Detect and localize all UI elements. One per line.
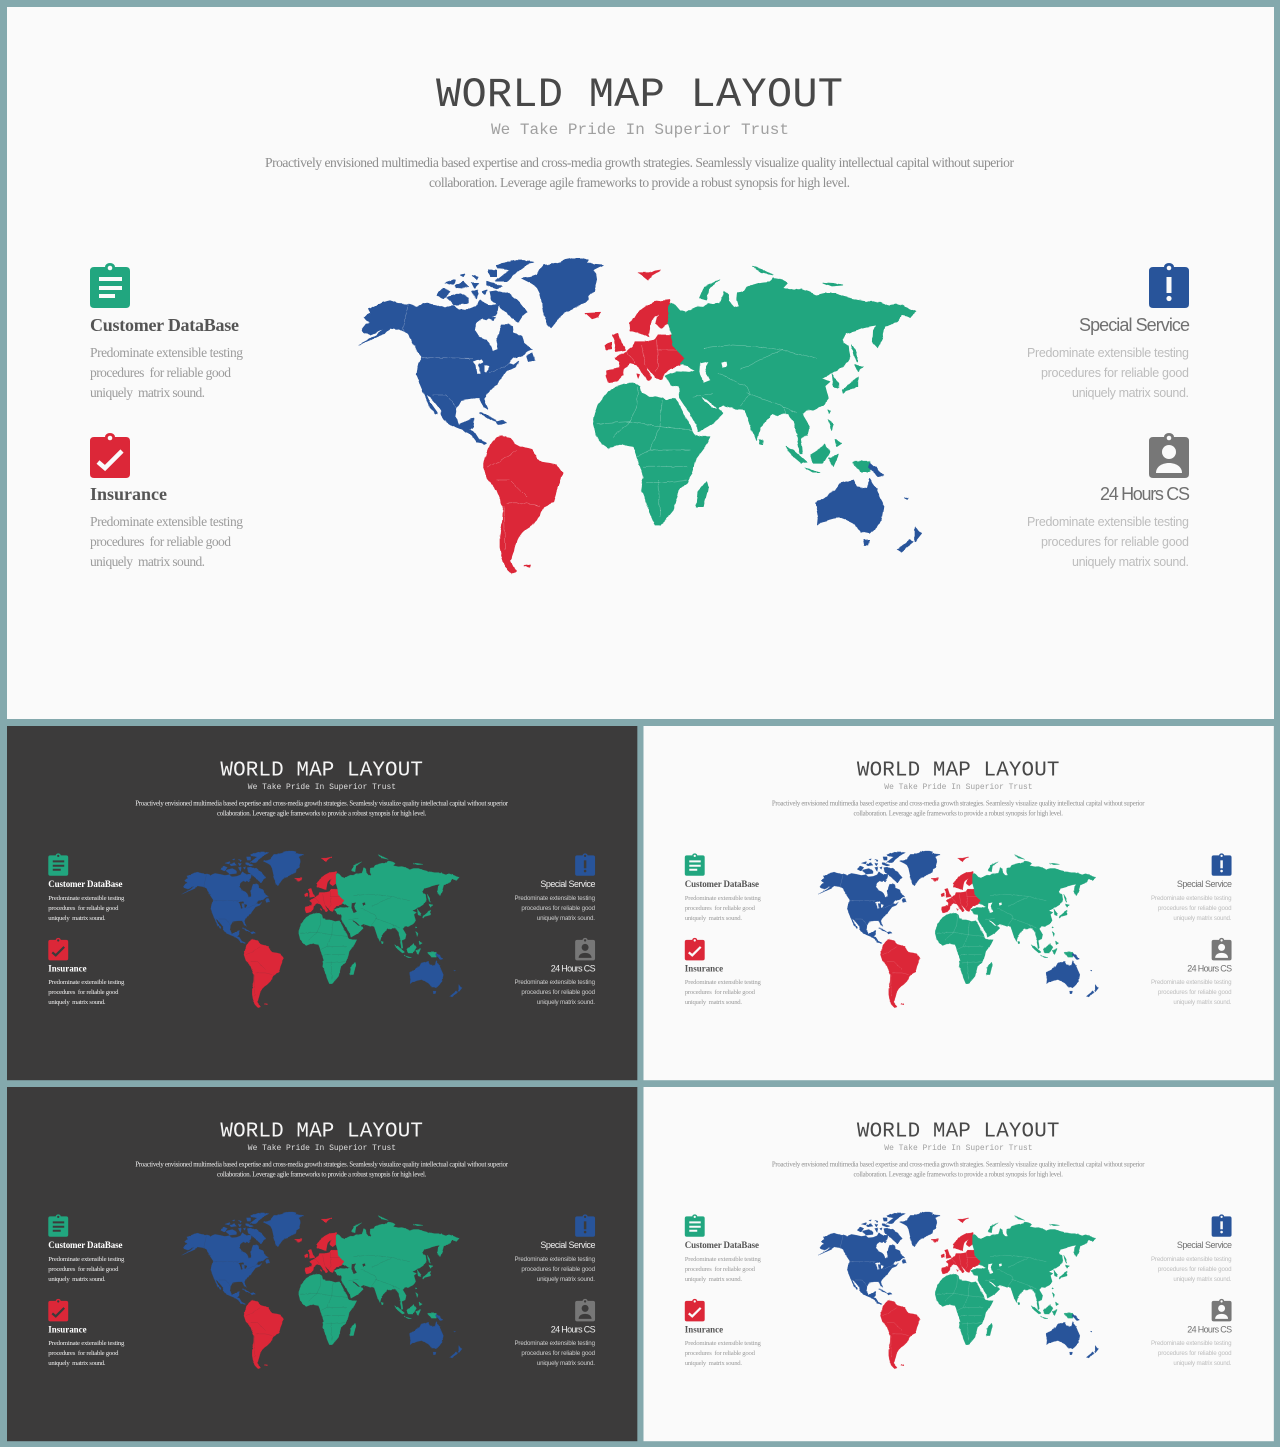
slide: dark thumbnail top: Proactively envisioned multimedia based expertise and cross-media growth strategies. Seamlessly visualize quality intellectual capital without superior: [135, 801, 509, 808]
slide: light thumbnail top: 24 Hours CS: [1187, 963, 1232, 973]
slide: dark thumbnail top: procedures for reliable good: [48, 989, 119, 996]
feature: Special Service: [1027, 263, 1190, 400]
slide: dark thumbnail top: Predominate extensible testing: [514, 979, 596, 986]
slide: light thumbnail top: collaboration. Leverage agile frameworks to provide a robust synopsis for high level.: [853, 811, 1063, 818]
slide: dark thumbnail top: Customer DataBase: [48, 879, 122, 889]
slide: dark thumbnail top: uniquely matrix sound.: [537, 915, 595, 922]
feature: Special Service: Special Service: [1079, 315, 1190, 335]
intro paragraph: [265, 155, 1014, 190]
slide: dark thumbnail top: uniquely matrix sound.: [48, 999, 106, 1006]
slide: main light slide: [7, 7, 1274, 719]
slide: light thumbnail top: uniquely matrix sound.: [685, 999, 742, 1006]
slide: light thumbnail top: procedures for reliable good: [1158, 905, 1232, 912]
slide: light thumbnail top: Insurance: [685, 963, 723, 973]
slide: dark thumbnail bottom: Customer DataBase: [48, 1240, 122, 1250]
slide: dark thumbnail bottom: procedures for reliable good: [48, 1266, 119, 1273]
slide: dark thumbnail top: procedures for reliable good: [521, 989, 596, 996]
slide: light thumbnail top: uniquely matrix sound.: [1173, 999, 1232, 1006]
slide: light thumbnail top: [644, 726, 1274, 1080]
feature: Special Service: procedures for reliable good: [1041, 366, 1189, 380]
slide: light thumbnail top: Special Service: [1177, 879, 1232, 889]
slide: light thumbnail top: Predominate extensible testing: [1151, 979, 1232, 986]
slide: light thumbnail bottom: Special Service: [1177, 1240, 1232, 1250]
slide: dark thumbnail bottom: procedures for reliable good: [521, 1266, 596, 1273]
slide: light thumbnail bottom: procedures for reliable good: [1158, 1350, 1232, 1357]
map: Americas, Greenland: [358, 258, 603, 573]
feature: Customer DataBase: Predominate extensible testing: [90, 345, 243, 360]
slide: light thumbnail bottom: [644, 1087, 1274, 1441]
slide: dark thumbnail bottom: Proactively envisioned multimedia based expertise and cross-media growth strategies. Seamlessly visualize quality intellectual capital without superior: [135, 1162, 509, 1169]
slide: dark thumbnail bottom: uniquely matrix sound.: [537, 1276, 595, 1283]
slide: dark thumbnail top: Predominate extensible testing: [48, 979, 125, 986]
feature: Customer DataBase: uniquely matrix sound.: [90, 385, 205, 400]
slide: light thumbnail bottom: uniquely matrix sound.: [1173, 1276, 1232, 1283]
feature: 24 Hours CS: 24 Hours CS: [1100, 484, 1190, 504]
slide: dark thumbnail top: uniquely matrix sound.: [537, 999, 595, 1006]
slide: light thumbnail bottom: WORLD MAP LAYOUT: [857, 1120, 1059, 1143]
icon: green clipboard: [90, 263, 130, 308]
feature: Special Service: uniquely matrix sound.: [1072, 386, 1189, 400]
slide: light thumbnail bottom: Predominate extensible testing: [685, 1340, 762, 1347]
slide: dark thumbnail top: [7, 726, 637, 1080]
slide: dark thumbnail top: procedures for reliable good: [521, 905, 596, 912]
slide: light thumbnail bottom: Customer DataBase: [685, 1240, 759, 1250]
slide: light thumbnail bottom: Predominate extensible testing: [685, 1256, 762, 1263]
slide: dark thumbnail bottom: We Take Pride In Superior Trust: [248, 1144, 396, 1153]
slide: light thumbnail bottom: uniquely matrix sound.: [1173, 1360, 1232, 1367]
slide: dark thumbnail bottom: Predominate extensible testing: [48, 1256, 125, 1263]
slide: dark thumbnail top: We Take Pride In Superior Trust: [248, 783, 396, 792]
slide: light thumbnail bottom: 24 Hours CS: [1187, 1324, 1232, 1334]
slide: dark thumbnail top: 24 Hours CS: [551, 963, 596, 973]
Europe: [585, 270, 685, 383]
South America: [483, 436, 563, 573]
feature: Insurance: [90, 433, 243, 569]
feature: Insurance: uniquely matrix sound.: [90, 554, 205, 569]
slide: dark thumbnail bottom: collaboration. Leverage agile frameworks to provide a robust synopsis for high level.: [217, 1172, 427, 1179]
slide: light thumbnail top: procedures for reliable good: [685, 905, 756, 912]
icon: blue clipboard alert: [1149, 263, 1189, 308]
slide: dark thumbnail top: procedures for reliable good: [48, 905, 119, 912]
feature: 24 Hours CS: Predominate extensible testing: [1027, 515, 1189, 529]
slide: light thumbnail bottom: procedures for reliable good: [685, 1350, 756, 1357]
slide: dark thumbnail bottom: Predominate extensible testing: [514, 1256, 596, 1263]
slide: light thumbnail top: uniquely matrix sound.: [685, 915, 742, 922]
slide: light thumbnail top: Predominate extensible testing: [1151, 895, 1232, 902]
Greenland: [522, 258, 603, 328]
feature: 24 Hours CS: uniquely matrix sound.: [1072, 555, 1189, 569]
slide: light thumbnail top: WORLD MAP LAYOUT: [857, 759, 1059, 782]
slide: light thumbnail top: procedures for reliable good: [685, 989, 756, 996]
map: Europe, Africa, Asia, Oceania: [585, 267, 922, 552]
slide: light thumbnail bottom: Predominate extensible testing: [1151, 1340, 1232, 1347]
slide: dark thumbnail bottom: procedures for reliable good: [521, 1350, 596, 1357]
slide: light thumbnail bottom: Insurance: [685, 1324, 723, 1334]
slide: dark thumbnail bottom: uniquely matrix sound.: [48, 1360, 106, 1367]
slide: dark thumbnail bottom: WORLD MAP LAYOUT: [220, 1120, 423, 1143]
slide: dark thumbnail bottom: uniquely matrix sound.: [48, 1276, 106, 1283]
slide: light thumbnail top: procedures for reliable good: [1158, 989, 1232, 996]
feature: Customer DataBase: Customer DataBase: [90, 315, 239, 335]
Asia: [665, 267, 916, 453]
subtitle: We Take Pride In Superior Trust: [491, 121, 789, 139]
feature: Insurance: procedures for reliable good: [90, 534, 231, 549]
slide: light thumbnail top: Predominate extensible testing: [685, 895, 762, 902]
feature: 24 Hours CS: procedures for reliable good: [1041, 535, 1189, 549]
title: WORLD MAP LAYOUT: [436, 71, 843, 119]
feature: Special Service: Predominate extensible testing: [1027, 346, 1189, 360]
slide: dark thumbnail top: collaboration. Leverage agile frameworks to provide a robust synopsis for high level.: [217, 811, 427, 818]
feature: 24 Hours CS: [1027, 433, 1190, 569]
slide: light thumbnail top: Customer DataBase: [685, 879, 759, 889]
slide: dark thumbnail top: Predominate extensible testing: [48, 895, 125, 902]
North America: [358, 260, 535, 445]
feature: Customer DataBase: procedures for reliable good: [90, 365, 231, 380]
slide: light thumbnail top: Proactively envisioned multimedia based expertise and cross-media growth strategies. Seamlessly visualize quality intellectual capital without superior: [772, 801, 1145, 808]
slide: light thumbnail top: We Take Pride In Superior Trust: [884, 783, 1033, 792]
slide: dark thumbnail bottom: Insurance: [48, 1324, 87, 1334]
slide: dark thumbnail bottom: 24 Hours CS: [551, 1324, 596, 1334]
slide: light thumbnail bottom: procedures for reliable good: [685, 1266, 756, 1273]
slide: light thumbnail bottom: procedures for reliable good: [1158, 1266, 1232, 1273]
slide: dark thumbnail top: uniquely matrix sound.: [48, 915, 106, 922]
slide: light thumbnail bottom: uniquely matrix sound.: [685, 1360, 742, 1367]
slide: dark thumbnail bottom: Predominate extensible testing: [514, 1340, 596, 1347]
feature: Customer DataBase: [90, 263, 243, 400]
Indonesia, Philippines: [786, 420, 870, 473]
slide: light thumbnail top: uniquely matrix sound.: [1173, 915, 1232, 922]
slide: light thumbnail bottom: collaboration. Leverage agile frameworks to provide a robust synopsis for high level.: [853, 1172, 1063, 1179]
slide: dark thumbnail bottom: Predominate extensible testing: [48, 1340, 125, 1347]
feature: Insurance: Insurance: [90, 484, 167, 504]
intro paragraph: Proactively envisioned multimedia based expertise and cross-media growth strategies. Seamlessly visualize quality intellectual capital without superior: [265, 155, 1014, 170]
slide: dark thumbnail top: Predominate extensible testing: [514, 895, 596, 902]
slide: dark thumbnail top: Special Service: [540, 879, 596, 889]
slide: dark thumbnail bottom: [7, 1087, 637, 1441]
slide: light thumbnail bottom: Proactively envisioned multimedia based expertise and cross-media growth strategies. Seamlessly visualize quality intellectual capital without superior: [772, 1162, 1145, 1169]
slide: light thumbnail top: Predominate extensible testing: [685, 979, 762, 986]
world map: [358, 258, 922, 573]
slide: dark thumbnail bottom: procedures for reliable good: [48, 1350, 119, 1357]
slide: light thumbnail bottom: Predominate extensible testing: [1151, 1256, 1232, 1263]
slide: dark thumbnail top: WORLD MAP LAYOUT: [220, 759, 423, 782]
Africa: [593, 383, 710, 525]
icon: grey clipboard person: [1149, 433, 1189, 478]
slide: dark thumbnail bottom: Special Service: [540, 1240, 596, 1250]
slide: light thumbnail bottom: uniquely matrix sound.: [685, 1276, 742, 1283]
intro paragraph: collaboration. Leverage agile frameworks to provide a robust synopsis for high level.: [429, 175, 850, 190]
slide: light thumbnail bottom: We Take Pride In Superior Trust: [884, 1144, 1033, 1153]
slide: dark thumbnail bottom: uniquely matrix sound.: [537, 1360, 595, 1367]
feature: Insurance: Predominate extensible testing: [90, 514, 243, 529]
Australia, New Zealand: [816, 463, 922, 552]
slide: dark thumbnail top: Insurance: [48, 963, 87, 973]
icon: red clipboard check: [90, 433, 130, 478]
